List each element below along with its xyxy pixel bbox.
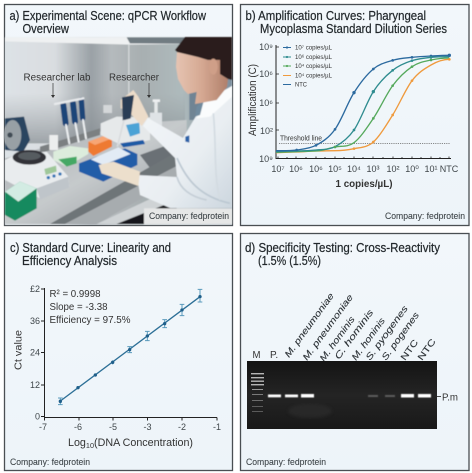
caption: company d: Company: fedprotein xyxy=(246,457,326,467)
x axis title: (DNA Concentration) xyxy=(94,437,193,449)
y tick labels: 12 xyxy=(30,380,40,390)
label: researcher lab xyxy=(24,72,91,98)
band marker: P.m xyxy=(442,392,458,404)
x tick labels: 10⁶ xyxy=(289,164,303,174)
x axis title: Log xyxy=(68,437,86,449)
y tick labels: 10⁶ xyxy=(259,98,273,108)
panel: standard curve xyxy=(4,234,232,470)
lane labels: NTC xyxy=(416,336,438,362)
y tick labels: £2 xyxy=(30,284,40,294)
lane labels: S. pyogenes xyxy=(364,303,410,362)
pipettes xyxy=(55,98,86,143)
heading: panel b: b) Amplification Curves: Pharyngeal xyxy=(246,8,426,23)
heading: panel a: Overview xyxy=(22,21,70,36)
y tick labels xyxy=(30,284,40,422)
caption: company c: Company: fedprotein xyxy=(10,457,90,467)
glow xyxy=(288,404,332,418)
lane labels: M xyxy=(252,350,260,361)
heading: panel c: Efficiency Analysis xyxy=(22,253,117,268)
heading: panel b xyxy=(246,8,447,36)
lane labels: M. pneumoniae xyxy=(283,291,336,359)
thermal block xyxy=(5,152,69,198)
face and neck xyxy=(176,52,228,104)
hair xyxy=(175,37,232,80)
y axis title: Amplification (C) xyxy=(247,64,259,136)
heading: panel d: (1.5% (1.5%) xyxy=(258,253,321,268)
x tick labels: 10³ xyxy=(366,164,380,174)
x tick labels: 10⁵ xyxy=(328,164,342,174)
axes xyxy=(276,45,451,158)
coat xyxy=(137,86,232,208)
lane labels xyxy=(252,291,438,363)
back instrument xyxy=(101,117,150,146)
x tick labels: 10² xyxy=(386,164,400,174)
heading: panel c: c) Standard Curve: Linearity and xyxy=(10,240,171,255)
x tick labels: -7 xyxy=(39,422,47,432)
x tick labels: -6 xyxy=(74,422,82,432)
x tick labels xyxy=(39,422,221,432)
curves xyxy=(276,54,451,153)
legend: NTC xyxy=(295,82,308,88)
statistics xyxy=(50,289,131,326)
x tick labels: 10⁰ xyxy=(405,164,419,174)
x tick labels xyxy=(271,164,459,174)
legend: 10⁷ copies/µL xyxy=(295,44,333,52)
axes xyxy=(41,288,217,420)
y tick labels: 10⁶ xyxy=(259,69,273,79)
heading: panel a xyxy=(10,8,207,36)
regression line with points xyxy=(58,289,202,405)
heading: panel d: d) Specificity Testing: Cross-Reactivity xyxy=(245,240,440,255)
centrifuge xyxy=(5,117,30,152)
y tick labels: 10² xyxy=(260,126,273,136)
caption: company b: Company: fedprotein xyxy=(385,211,465,221)
label: researcher xyxy=(109,72,160,98)
y tick labels: 10⁹ xyxy=(259,154,273,164)
chart: amplification curves xyxy=(247,42,459,190)
ladder xyxy=(251,373,264,412)
label box xyxy=(144,208,232,224)
threshold line: Threshold line xyxy=(280,136,322,142)
lane labels: P. xyxy=(270,350,278,361)
chart: standard curve xyxy=(12,284,221,450)
legend: 10⁶ copies/µL xyxy=(295,54,333,61)
lane labels: M. hominis xyxy=(318,314,357,363)
ear xyxy=(209,59,218,75)
lane labels: C. hominis xyxy=(333,307,376,361)
label: researcher: Researcher xyxy=(109,72,160,84)
statistics: Slope = -3.38 xyxy=(50,302,108,313)
lane labels: M. honinis xyxy=(350,315,387,362)
legend: 10⁴ copies/µL xyxy=(295,72,333,80)
axis tick marks xyxy=(276,47,449,158)
mint box xyxy=(53,146,88,167)
panel: experimental scene xyxy=(4,4,233,226)
x tick labels: 10⁴ xyxy=(347,164,361,174)
legend xyxy=(283,44,333,88)
label: researcher lab: Researcher lab xyxy=(24,72,91,84)
x tick labels: 10¹ xyxy=(424,164,438,174)
y tick labels: 36 xyxy=(30,316,40,326)
bands xyxy=(268,394,431,398)
hands xyxy=(121,90,148,126)
x tick labels: 10⁷ xyxy=(271,164,285,174)
x axis title: 10 xyxy=(86,441,94,450)
caption: company a: Company: fedprotein xyxy=(149,211,229,221)
lane labels: NTC xyxy=(399,337,421,362)
x tick labels: 10⁶ xyxy=(309,164,323,174)
legend: 10⁴ copies/µL xyxy=(295,63,333,70)
y tick labels: 0 xyxy=(35,412,40,422)
heading: panel b: Mycoplasma Standard Dilution Series xyxy=(260,21,447,36)
y tick labels: 10⁹ xyxy=(259,42,273,52)
lane labels: S. pogenes xyxy=(380,310,421,362)
statistics: R² = 0.9998 xyxy=(50,289,101,300)
panel: specificity testing xyxy=(240,234,469,470)
x tick labels: -2 xyxy=(178,422,186,432)
blue rack xyxy=(79,148,137,182)
x tick labels: -1 xyxy=(213,422,221,432)
y tick labels: 24 xyxy=(30,348,40,358)
orange box xyxy=(88,135,112,156)
x tick labels: -5 xyxy=(109,422,117,432)
y axis title: Ct value xyxy=(12,330,24,370)
heading: panel d xyxy=(245,240,440,268)
y tick labels xyxy=(259,42,273,164)
lane labels: M. pneumoniae xyxy=(301,292,355,362)
photo: researcher at biosafety cabinet xyxy=(4,37,232,225)
x tick labels: NTC xyxy=(440,164,459,174)
panel: amplification curves xyxy=(240,4,469,226)
heading: panel a: a) Experimental Scene: qPCR Workflow xyxy=(10,8,207,23)
heading: panel c xyxy=(10,240,171,268)
gel image xyxy=(247,361,437,429)
x tick labels: -3 xyxy=(143,422,152,432)
x axis title: 1 copies/µL) xyxy=(336,178,392,190)
statistics: Efficiency = 97.5% xyxy=(50,315,131,326)
green tip box xyxy=(5,182,37,221)
